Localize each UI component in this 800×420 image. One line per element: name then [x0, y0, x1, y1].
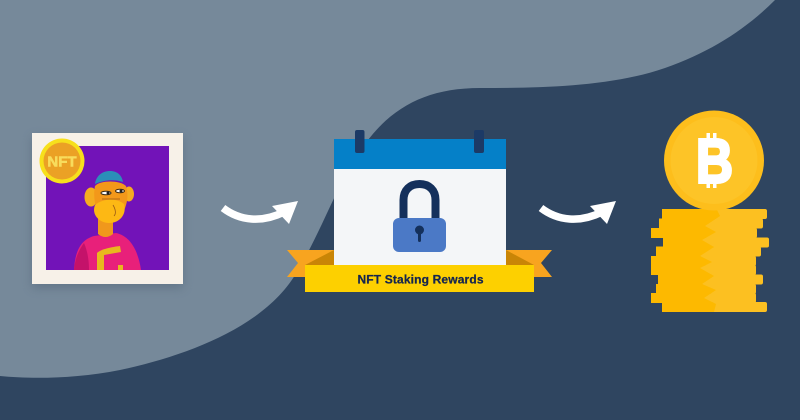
ribbon banner — [305, 265, 534, 292]
arrow: calendar to coins — [541, 201, 616, 224]
calendar pegs — [355, 130, 484, 153]
calendar header — [334, 139, 506, 169]
badge: NFT — [40, 138, 84, 184]
icon: bitcoin coin: B — [696, 128, 733, 196]
illustration: ape — [74, 171, 141, 270]
ribbon tails — [287, 250, 552, 277]
panel: NFT picture card — [32, 133, 183, 288]
icon: bitcoin coin — [664, 110, 764, 210]
icon: coin stack — [651, 209, 769, 312]
ribbon title: NFT Staking Rewards — [358, 272, 484, 286]
icon: padlock — [393, 184, 446, 252]
arrow: NFT to calendar — [223, 201, 298, 224]
panel: calendar with ribbon — [287, 130, 552, 292]
badge: NFT: NFT — [47, 154, 77, 170]
calendar page — [334, 168, 506, 266]
